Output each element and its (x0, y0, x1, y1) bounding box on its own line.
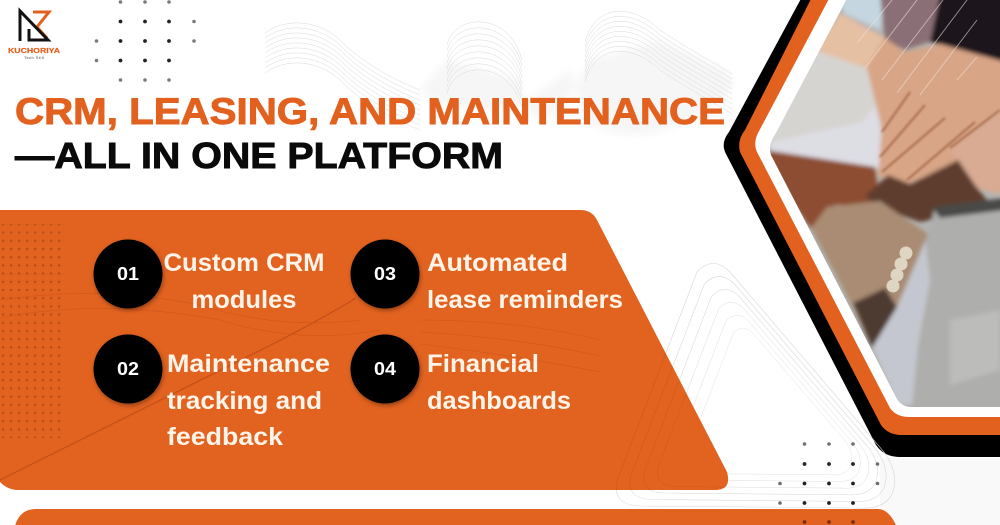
label 04 (427, 350, 571, 415)
label 01: modules (192, 286, 296, 314)
label 02 (167, 350, 330, 451)
photo: wooden table (765, 150, 880, 230)
panel: dot grid (0, 224, 63, 438)
logo (8, 11, 61, 60)
label 01 (164, 249, 324, 314)
logo mark (20, 11, 49, 41)
photo: paper on desk (771, 50, 883, 144)
logo tagline: Tech Still (24, 55, 44, 60)
photo: stacked hands (760, 0, 1000, 412)
badge 02: 02 (117, 359, 139, 379)
label 03: Automated (427, 249, 568, 277)
badge 03: 03 (374, 264, 396, 284)
photo: sleeve buttons (886, 246, 912, 292)
contour triangle lines (616, 264, 895, 508)
photo: grey shirt (904, 208, 1000, 407)
badge 03 (350, 240, 420, 308)
badge 02 (94, 334, 162, 404)
photo: top background (841, 0, 885, 30)
bottom dot grid (778, 442, 879, 524)
bottom orange bar (14, 509, 898, 525)
item 03 (350, 240, 623, 314)
label 02: Maintenance (167, 350, 330, 378)
item 04 (350, 334, 571, 415)
title line 2: —ALL IN ONE PLATFORM (15, 135, 503, 176)
photo: dark hand (865, 160, 990, 222)
badge 04: 04 (374, 359, 396, 379)
frame: orange (739, 0, 1000, 435)
label 04: dashboards (427, 387, 571, 415)
item 02 (94, 334, 330, 451)
label 02: feedback (167, 423, 283, 451)
photo: finger shadows (880, 92, 1000, 180)
badge 01: 01 (117, 264, 139, 284)
panel: contour lines (0, 293, 726, 490)
photo: light streaks (857, 0, 977, 95)
badge 01 (94, 240, 162, 308)
photo: tan sleeve (809, 198, 929, 325)
label 03 (427, 249, 623, 314)
title (15, 91, 725, 176)
hexagon photo frame (724, 0, 1000, 457)
label 03: lease reminders (427, 286, 623, 314)
wave line decoration (265, 11, 732, 135)
top dot grid (95, 0, 196, 82)
photo: upper hand (864, 36, 1000, 186)
label 01: Custom CRM (164, 249, 324, 277)
badge 04 (350, 334, 420, 404)
frame: black (724, 0, 1000, 457)
item 01 (94, 240, 324, 314)
label 02: tracking and (167, 387, 322, 415)
title line 1: CRM, LEASING, AND MAINTENANCE (15, 91, 725, 132)
label 04: Financial (427, 350, 539, 378)
frame: white (755, 0, 1000, 417)
main orange panel (0, 210, 728, 490)
logo name: KUCHORIYA (8, 46, 61, 55)
